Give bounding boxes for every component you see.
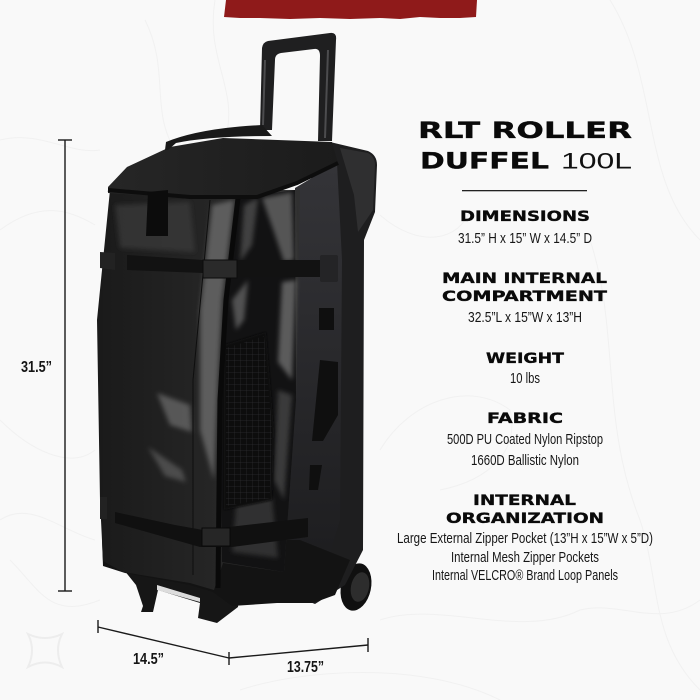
top lid — [108, 138, 338, 198]
spec: dimensions: DIMENSIONS — [460, 209, 590, 225]
width label: 13.75” — [287, 659, 324, 676]
spec: weight: 10 lbs — [510, 370, 540, 387]
depth label: 14.5” — [133, 651, 164, 668]
bottom base — [102, 540, 350, 606]
spec: dimensions — [458, 209, 592, 247]
logo watermark — [28, 634, 62, 667]
handle highlights — [263, 50, 328, 138]
title — [418, 119, 632, 174]
zipper pulls — [146, 190, 168, 236]
spec: internal organization: ORGANIZATION — [446, 511, 604, 527]
spec: fabric: 1660D Ballistic Nylon — [471, 452, 579, 469]
telescoping handle — [260, 33, 336, 141]
spec: fabric: 500D PU Coated Nylon Ripstop — [447, 431, 603, 448]
product: roller duffel bag — [97, 33, 377, 623]
spec: internal organization: INTERNAL — [473, 493, 576, 509]
front seam zipper — [218, 198, 238, 588]
mesh pocket — [224, 332, 274, 510]
dark right panel — [220, 190, 296, 572]
spec: internal organization: Internal VELCRO® Brand Loop Panels — [432, 567, 618, 584]
spec: main internal compartment: COMPARTMENT — [442, 289, 608, 305]
dimension: width — [229, 638, 368, 658]
spec: fabric — [447, 411, 603, 469]
carry handle — [165, 125, 272, 150]
spec: weight — [486, 351, 565, 387]
spec: weight: WEIGHT — [486, 351, 565, 367]
foot and rod — [124, 565, 240, 623]
upper strap and buckle — [100, 252, 338, 282]
side panel — [280, 163, 342, 585]
title: DUFFEL — [420, 150, 549, 174]
spec: internal organization: Internal Mesh Zipper Pockets — [451, 549, 599, 566]
spec: main internal compartment: MAIN INTERNAL — [442, 271, 607, 287]
lower strap and buckle — [100, 497, 308, 547]
dimension: height — [58, 140, 72, 591]
height label: 31.5” — [21, 359, 52, 376]
dimension: depth — [98, 620, 229, 665]
spec: fabric: FABRIC — [487, 411, 563, 427]
title: 100L — [561, 148, 632, 174]
gloss highlights — [115, 192, 296, 558]
rear wheel — [336, 560, 376, 614]
spec: dimensions: 31.5” H x 15” W x 14.5” D — [458, 230, 592, 247]
spec: internal organization — [397, 493, 653, 584]
front panel — [97, 190, 300, 590]
red torn banner — [224, 0, 477, 19]
lid zip edge — [108, 163, 338, 197]
hard shell side — [280, 142, 377, 604]
spec: main internal compartment: 32.5”L x 15”W x 13”H — [468, 309, 582, 326]
title: RLT ROLLER — [418, 119, 632, 144]
shell top bevel — [340, 148, 375, 232]
spec: main internal compartment — [442, 271, 608, 326]
side grab handles — [309, 308, 338, 490]
thin seam — [193, 200, 210, 575]
